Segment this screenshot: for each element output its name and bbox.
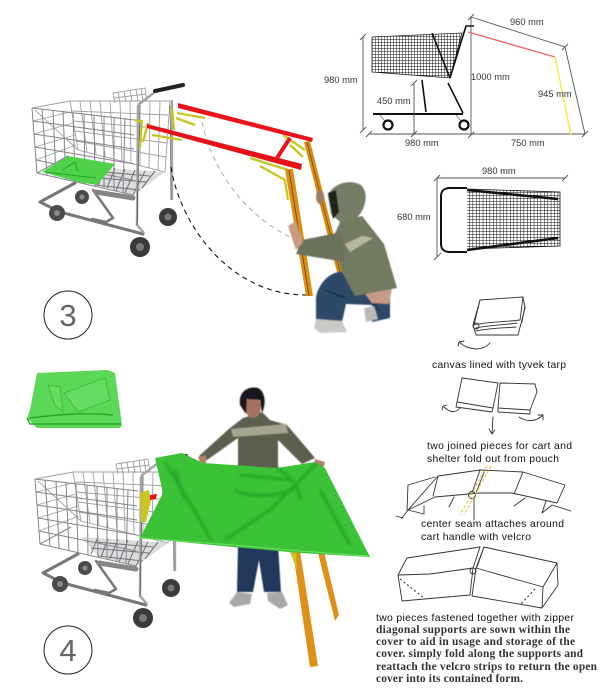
step number 3: 3 xyxy=(59,298,77,333)
green tarp held open xyxy=(140,453,370,557)
side cart frame xyxy=(373,26,474,125)
skin at back xyxy=(362,288,392,304)
jeans xyxy=(237,545,281,592)
labels xyxy=(397,166,516,222)
dimension labels: 960 mm xyxy=(510,17,544,27)
caption: center seam: cart handle with velcro xyxy=(421,532,531,543)
caption: center seam xyxy=(421,519,564,543)
dimension labels: 450 mm xyxy=(377,96,411,106)
step number 4: 4 xyxy=(59,633,77,668)
shoes xyxy=(314,319,347,333)
caption: pouch: canvas lined with tyvek tarp xyxy=(432,360,566,371)
caption: joined pieces: shelter fold out from pouch xyxy=(427,454,559,465)
caption: fastening and folding instructions: two pieces fastened together with zipper xyxy=(376,613,575,624)
caption: joined pieces xyxy=(427,441,572,465)
top view handle xyxy=(441,188,467,252)
standing person xyxy=(198,388,325,609)
wheels xyxy=(49,190,177,257)
side cart basket xyxy=(372,33,462,78)
chassis xyxy=(40,183,143,234)
caption: fastening and folding instructions: cover to aid in usage and storage of the xyxy=(376,636,575,648)
dimension lines xyxy=(434,175,568,260)
base mesh xyxy=(78,166,165,195)
torso xyxy=(332,216,397,296)
dimension labels xyxy=(324,17,572,148)
green pouch inside cart xyxy=(42,156,115,185)
shopping cart with green pouch (step 3) xyxy=(32,85,183,257)
hoodie stripe xyxy=(231,424,288,437)
yellow cover line xyxy=(555,57,571,135)
step number 4 xyxy=(44,626,92,674)
far hand xyxy=(316,190,324,204)
handle grip xyxy=(155,85,183,91)
labels: 680 mm xyxy=(397,212,431,222)
caption: fastening and folding instructions xyxy=(376,613,598,685)
front support pole xyxy=(285,169,313,296)
near arm xyxy=(296,232,345,262)
hood xyxy=(328,182,366,222)
caption: center seam: center seam attaches around xyxy=(421,519,564,530)
hands xyxy=(198,455,325,470)
sketch: two fastened pieces xyxy=(398,547,558,608)
far side and rear wires xyxy=(32,88,170,172)
sketch: opened pouch xyxy=(442,378,543,434)
face xyxy=(328,190,339,219)
dimension labels: 945 mm xyxy=(538,89,572,99)
dimension labels: 1000 mm xyxy=(471,72,510,82)
top view mesh xyxy=(454,188,560,252)
near side wires xyxy=(32,108,135,195)
caption: fastening and folding instructions: cover into its contained form. xyxy=(376,673,523,685)
handle frame xyxy=(137,92,172,233)
dimension labels: 980 mm xyxy=(324,75,358,85)
red beams xyxy=(147,103,313,170)
top view dimension diagram xyxy=(397,166,568,260)
labels: 980 mm xyxy=(482,166,516,176)
caption: fastening and folding instructions: diagonal supports are sown within the xyxy=(376,624,570,636)
dimension lines xyxy=(360,14,588,138)
shoes xyxy=(229,592,252,607)
dimension labels: 750 mm xyxy=(511,138,545,148)
cart under cover (step 4) xyxy=(35,456,186,628)
sketch: closed pouch xyxy=(458,297,525,349)
caption: fastening and folding instructions: reattach the velcro strips to return the open xyxy=(376,661,598,673)
hoodie body and arms xyxy=(199,412,315,470)
step number 3 xyxy=(44,291,92,339)
face xyxy=(245,396,261,418)
caption: fastening and folding instructions: cover. simply fold along the supports and xyxy=(376,648,584,660)
yellow brackets xyxy=(135,108,305,200)
rear support pole xyxy=(304,141,345,280)
folded green tarp xyxy=(27,370,122,428)
hair xyxy=(240,388,265,414)
side elevation dimension diagram xyxy=(324,14,588,148)
crouching person xyxy=(288,182,397,333)
red cover line xyxy=(468,32,555,57)
dimension labels: 980 mm xyxy=(405,138,439,148)
lower support poles xyxy=(290,551,339,667)
jeans xyxy=(316,272,390,322)
sketch: center seam at handle xyxy=(396,466,571,520)
fold-out path arcs xyxy=(171,122,306,295)
folded brackets on cart xyxy=(140,490,157,522)
caption: joined pieces: two joined pieces for cart and xyxy=(427,441,572,452)
